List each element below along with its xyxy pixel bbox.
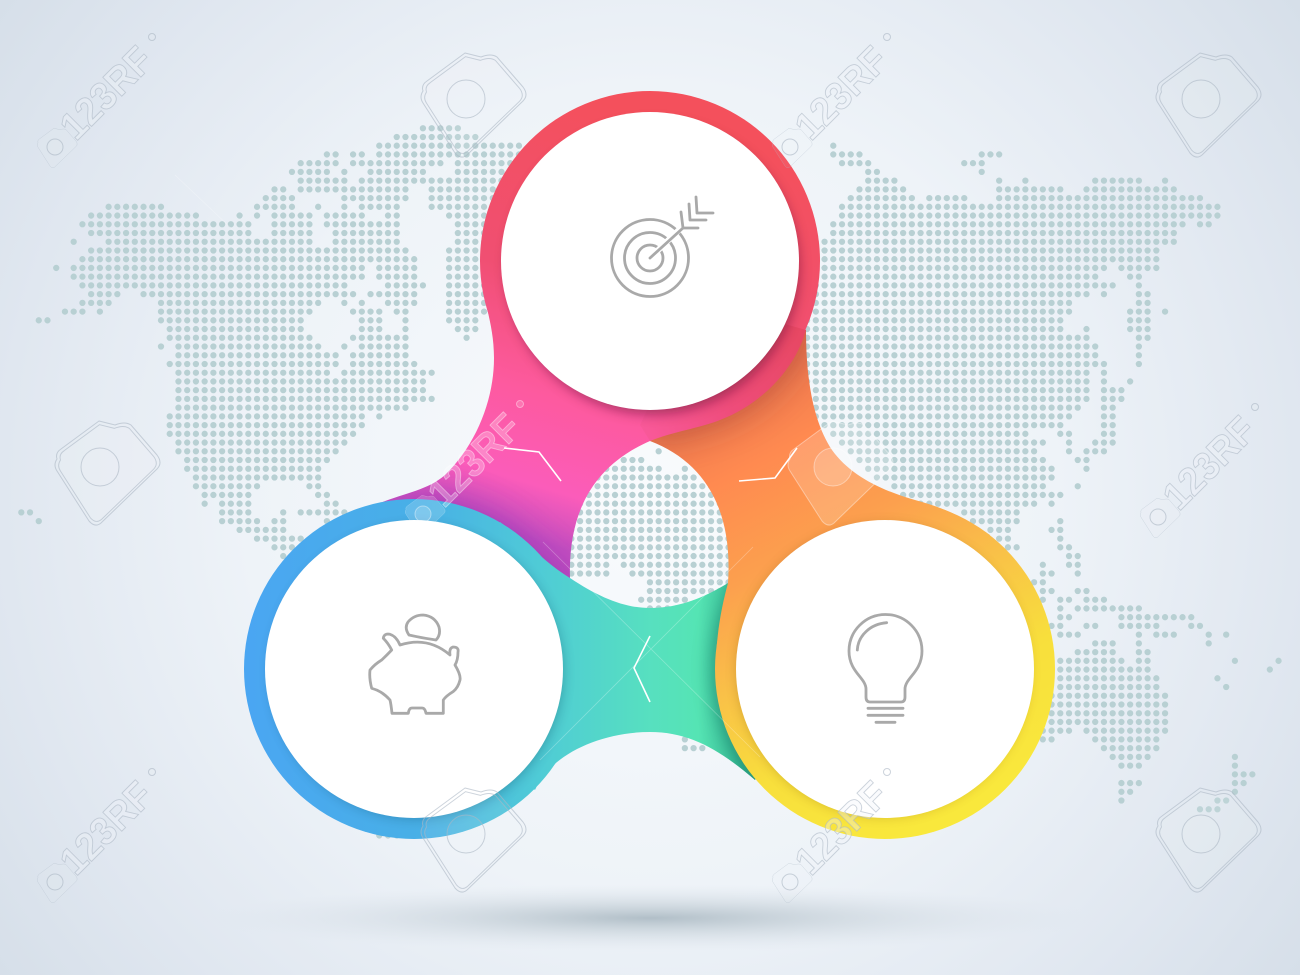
watermark: center: 123RF: [420, 406, 530, 515]
watermark: top middle: 123RF: [787, 39, 897, 148]
band: pink connector: [382, 311, 650, 578]
ring and band: orange to yellow: [650, 330, 1055, 839]
white circle: left: [265, 520, 563, 818]
arrow: orange band: [739, 448, 797, 481]
watermark: bottom left: 123RF: [52, 774, 162, 883]
watermark: top left: 123RF: [52, 39, 162, 148]
icon: piggy bank with coin: [370, 615, 460, 713]
ground shadow: [200, 884, 1100, 952]
three-circle diagram: [244, 91, 1057, 841]
white circle: right: [736, 520, 1034, 818]
ring and tail: red to pink: [480, 91, 820, 441]
dotted world map: [21, 128, 1279, 835]
shadow under left circle: [271, 526, 563, 818]
watermark: bottom middle: 123RF: [787, 774, 897, 883]
arrow: green band: [634, 636, 650, 702]
watermark: right: 123RF: [1155, 409, 1265, 518]
white circle: top: [501, 112, 799, 410]
shadow under top circle: [507, 122, 799, 414]
arrow: pink band: [504, 448, 561, 481]
shadow under right circle: [737, 524, 1029, 816]
icon: target with arrow: [612, 197, 713, 296]
icon: light bulb: [849, 614, 922, 722]
ring and band: blue to green: [244, 499, 756, 839]
watermark emblems: large eggs: [55, 53, 1261, 892]
